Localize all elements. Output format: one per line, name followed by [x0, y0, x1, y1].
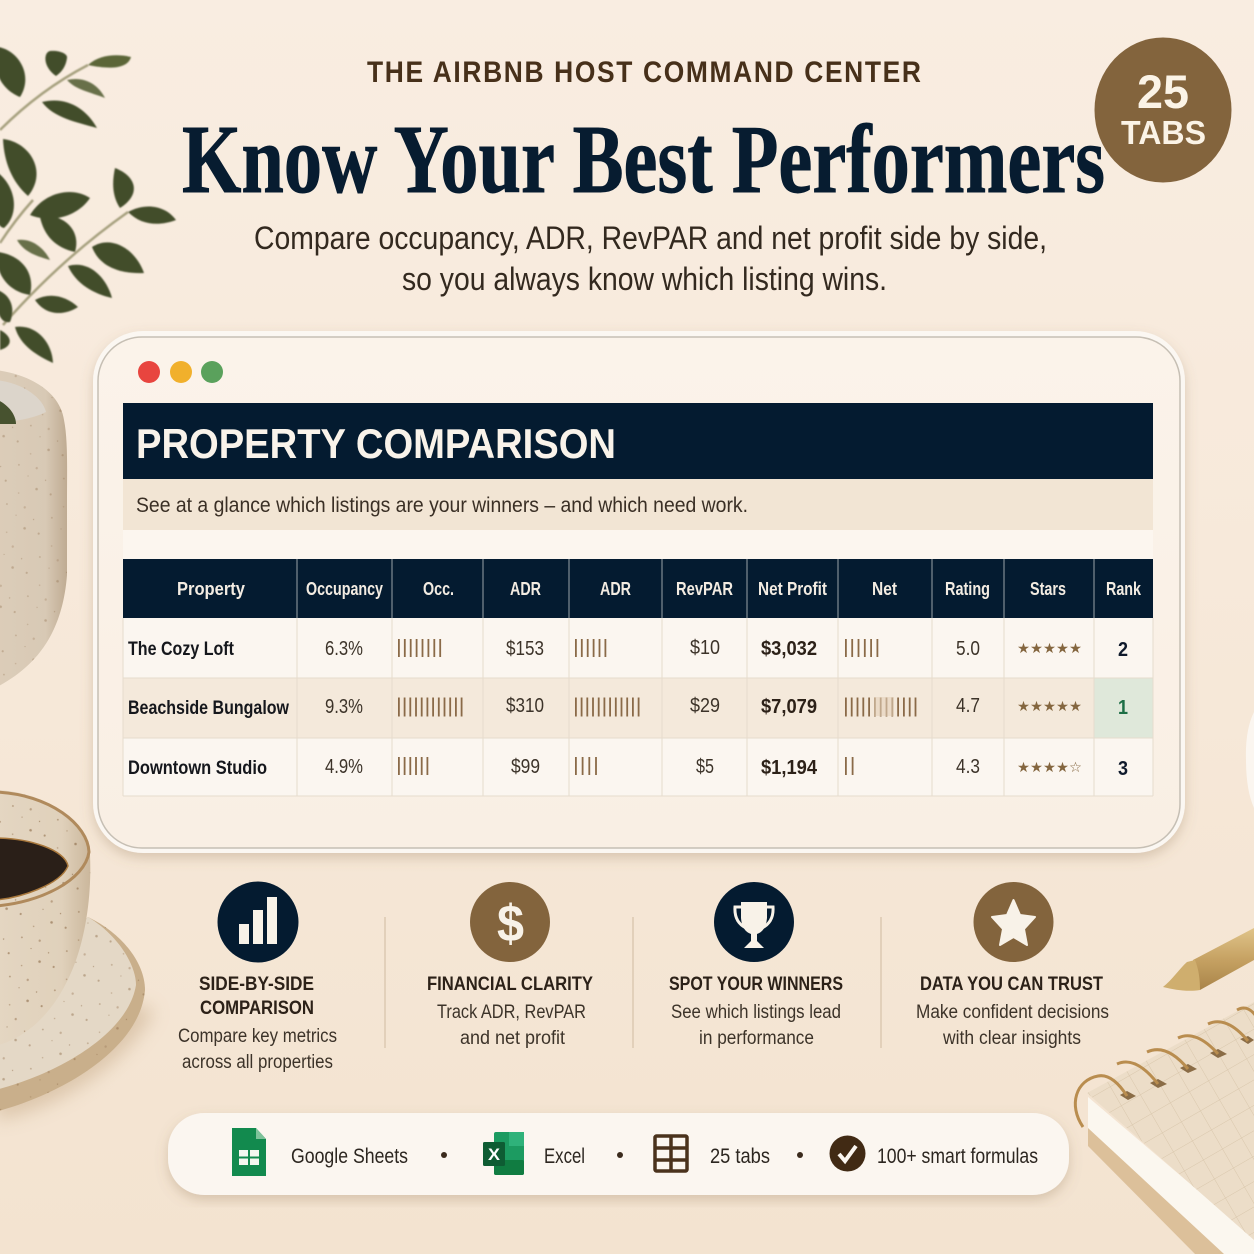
icon: Excel: [483, 1132, 524, 1175]
gold pen: [1163, 928, 1254, 991]
icon: dollar: $: [497, 895, 524, 953]
notebook: [1075, 1002, 1254, 1254]
feature: side-by-side comparison: COMPARISON: [200, 998, 314, 1019]
row: The Cozy Loft: The Cozy Loft: [128, 639, 235, 660]
table header row: Rank: [1106, 579, 1142, 599]
feature: financial clarity: Track ADR, RevPAR: [437, 1002, 586, 1023]
row: Beachside Bungalow: $29: [690, 695, 720, 717]
feature: data you can trust: with clear insights: [942, 1028, 1081, 1049]
window frame: [93, 331, 1185, 853]
icon: table grid: [655, 1136, 687, 1171]
table body backgrounds: [123, 618, 1153, 796]
feature dividers: [385, 917, 881, 1048]
icon: star: [974, 882, 1054, 962]
row: The Cozy Loft: ★★★★★: [1017, 641, 1082, 657]
feature: financial clarity: [427, 882, 593, 1049]
badge: 25 tabs: TABS: [1121, 114, 1206, 151]
row: Beachside Bungalow: [128, 695, 1128, 719]
row: Downtown Studio: Downtown Studio: [128, 758, 267, 779]
badge: 25 tabs: 25: [1137, 65, 1189, 118]
comparison table: [123, 559, 1153, 796]
table header row: Occ.: [423, 579, 454, 599]
row: The Cozy Loft: 5.0: [956, 638, 980, 660]
compatibility bar: 25 tabs: [710, 1145, 770, 1168]
row: Downtown Studio: $1,194: [761, 757, 818, 779]
row: The Cozy Loft: [128, 637, 1128, 661]
row: The Cozy Loft: $3,032: [761, 638, 817, 660]
compatibility bar: 100+ smart formulas: [877, 1145, 1038, 1168]
row: Downtown Studio: 3: [1118, 758, 1128, 780]
subtitle: [254, 220, 1047, 297]
icon: Excel: X: [488, 1145, 501, 1164]
table header row: Property: [177, 579, 245, 599]
row: The Cozy Loft: $10: [690, 637, 720, 659]
table header row: [123, 559, 1153, 618]
feature: side-by-side comparison: across all properties: [182, 1052, 333, 1073]
table header row: Stars: [1030, 579, 1066, 599]
row: The Cozy Loft: 2: [1118, 639, 1128, 661]
feature: spot your winners: [669, 882, 843, 1049]
icon: Google Sheets: [232, 1128, 266, 1176]
feature: side-by-side comparison: Compare key metrics: [178, 1026, 337, 1047]
row: The Cozy Loft: $153: [506, 638, 544, 660]
feature: data you can trust: DATA YOU CAN TRUST: [920, 974, 1103, 995]
title eyebrow: THE AIRBNB HOST COMMAND CENTER: [367, 54, 921, 88]
table header row: RevPAR: [676, 579, 733, 599]
row: The Cozy Loft: 6.3%: [325, 638, 363, 660]
table header row: Occupancy: [306, 579, 383, 599]
row: Beachside Bungalow: $310: [506, 695, 544, 717]
table header row: ADR: [510, 579, 541, 599]
feature: financial clarity: and net profit: [460, 1028, 566, 1049]
subtitle: Compare occupancy, ADR, RevPAR and net profit side by side,: [254, 220, 1047, 256]
feature: spot your winners: See which listings lead: [671, 1002, 841, 1023]
panel subheading: [123, 479, 1153, 530]
plant with leaves: [0, 47, 176, 363]
row: Beachside Bungalow: Beachside Bungalow: [128, 698, 289, 719]
feature: side-by-side comparison: SIDE-BY-SIDE: [199, 974, 314, 995]
icon: bar chart: [218, 882, 298, 962]
row: Beachside Bungalow: ★★★★★: [1017, 699, 1082, 715]
compatibility bar: [168, 1113, 1069, 1195]
row: Beachside Bungalow: 4.7: [956, 695, 980, 717]
feature: side-by-side comparison: [178, 882, 337, 1073]
coffee: [0, 838, 68, 900]
row: Beachside Bungalow: $7,079: [761, 696, 817, 718]
panel subheading: See at a glance which listings are your winners – and which need work.: [136, 494, 748, 517]
compatibility bar: Excel: [544, 1145, 585, 1168]
coffee cup and saucer: [0, 790, 155, 1120]
feature: spot your winners: in performance: [699, 1028, 814, 1049]
window control dots: [138, 361, 223, 383]
table header row: Net: [872, 579, 897, 599]
panel: comparison window: [93, 331, 1185, 853]
notebook spiral: [1075, 1008, 1254, 1127]
table header row: ADR: [600, 579, 631, 599]
row: Beachside Bungalow: 1: [1118, 697, 1128, 719]
icon: dollar: [470, 882, 550, 962]
table header row: Net Profit: [758, 579, 827, 599]
row: Downtown Studio: $99: [511, 756, 540, 778]
icon: trophy: [714, 882, 794, 962]
row: Beachside Bungalow: 9.3%: [325, 696, 363, 718]
saucer: [0, 917, 155, 1120]
table header row: Rating: [945, 579, 990, 599]
row: Downtown Studio: 4.3: [956, 756, 980, 778]
row: Downtown Studio: ★★★★☆: [1017, 760, 1082, 776]
row: Downtown Studio: $5: [696, 756, 714, 778]
row: Downtown Studio: [128, 756, 1128, 780]
feature: data you can trust: Make confident decisions: [916, 1002, 1109, 1023]
icon: check circle: [830, 1136, 866, 1172]
cup body: [0, 790, 90, 1046]
row: Downtown Studio: 4.9%: [325, 756, 363, 778]
compatibility bar: Google Sheets: [291, 1145, 408, 1168]
feature: financial clarity: FINANCIAL CLARITY: [427, 974, 593, 995]
notebook pages: [1087, 1002, 1254, 1254]
panel heading: PROPERTY COMPARISON: [136, 420, 616, 467]
badge: 25 tabs: [1094, 38, 1232, 182]
plant pot: [0, 370, 67, 688]
right edge white cup: [1246, 712, 1254, 808]
feature: spot your winners: SPOT YOUR WINNERS: [669, 974, 843, 995]
feature: data you can trust: [916, 882, 1109, 1049]
panel heading: [123, 403, 1153, 479]
subtitle: so you always know which listing wins.: [402, 261, 887, 297]
